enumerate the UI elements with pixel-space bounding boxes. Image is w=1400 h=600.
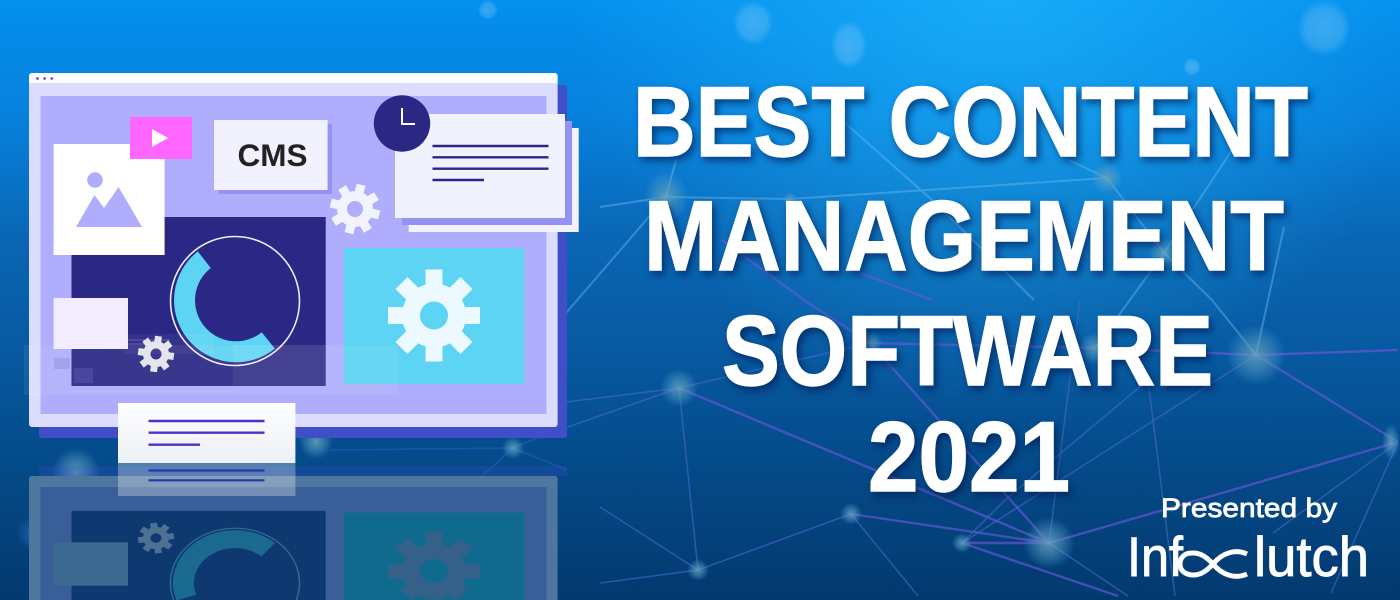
CMS card: CMS (238, 137, 308, 173)
icon: medium gear (325, 179, 385, 239)
title: 2021 (868, 401, 1070, 512)
monitor reflection on the floor (29, 466, 567, 600)
image card (54, 144, 165, 255)
floating text card (118, 403, 295, 463)
InfoClutch logo (1127, 525, 1369, 588)
network of connected lines (330, 123, 1398, 596)
floating card reflection (118, 463, 295, 496)
monitor illustration (24, 73, 579, 438)
donut ring chart (170, 236, 300, 366)
monitor frame (29, 73, 558, 427)
translucent glass strip (24, 334, 398, 395)
InfoClutch logo: Inf (1127, 525, 1183, 588)
CMS card (214, 120, 332, 194)
icon: clock (374, 95, 430, 152)
InfoClutch logo: lutch (1254, 525, 1369, 588)
icon: large gear (388, 270, 480, 362)
document stack (395, 114, 579, 232)
title: BEST CONTENT (633, 66, 1308, 177)
monitor shadow (39, 85, 567, 438)
title (633, 66, 1308, 512)
title: SOFTWARE (722, 295, 1213, 406)
icon: small gear (136, 334, 176, 374)
settings panel (344, 248, 524, 384)
title: MANAGEMENT (644, 180, 1284, 291)
dark chart panel (72, 217, 326, 386)
small note card (54, 298, 128, 349)
video play tile (130, 117, 192, 159)
presented by label: Presented by (1161, 493, 1338, 523)
browser top bar (29, 73, 558, 83)
screen area (40, 96, 546, 414)
